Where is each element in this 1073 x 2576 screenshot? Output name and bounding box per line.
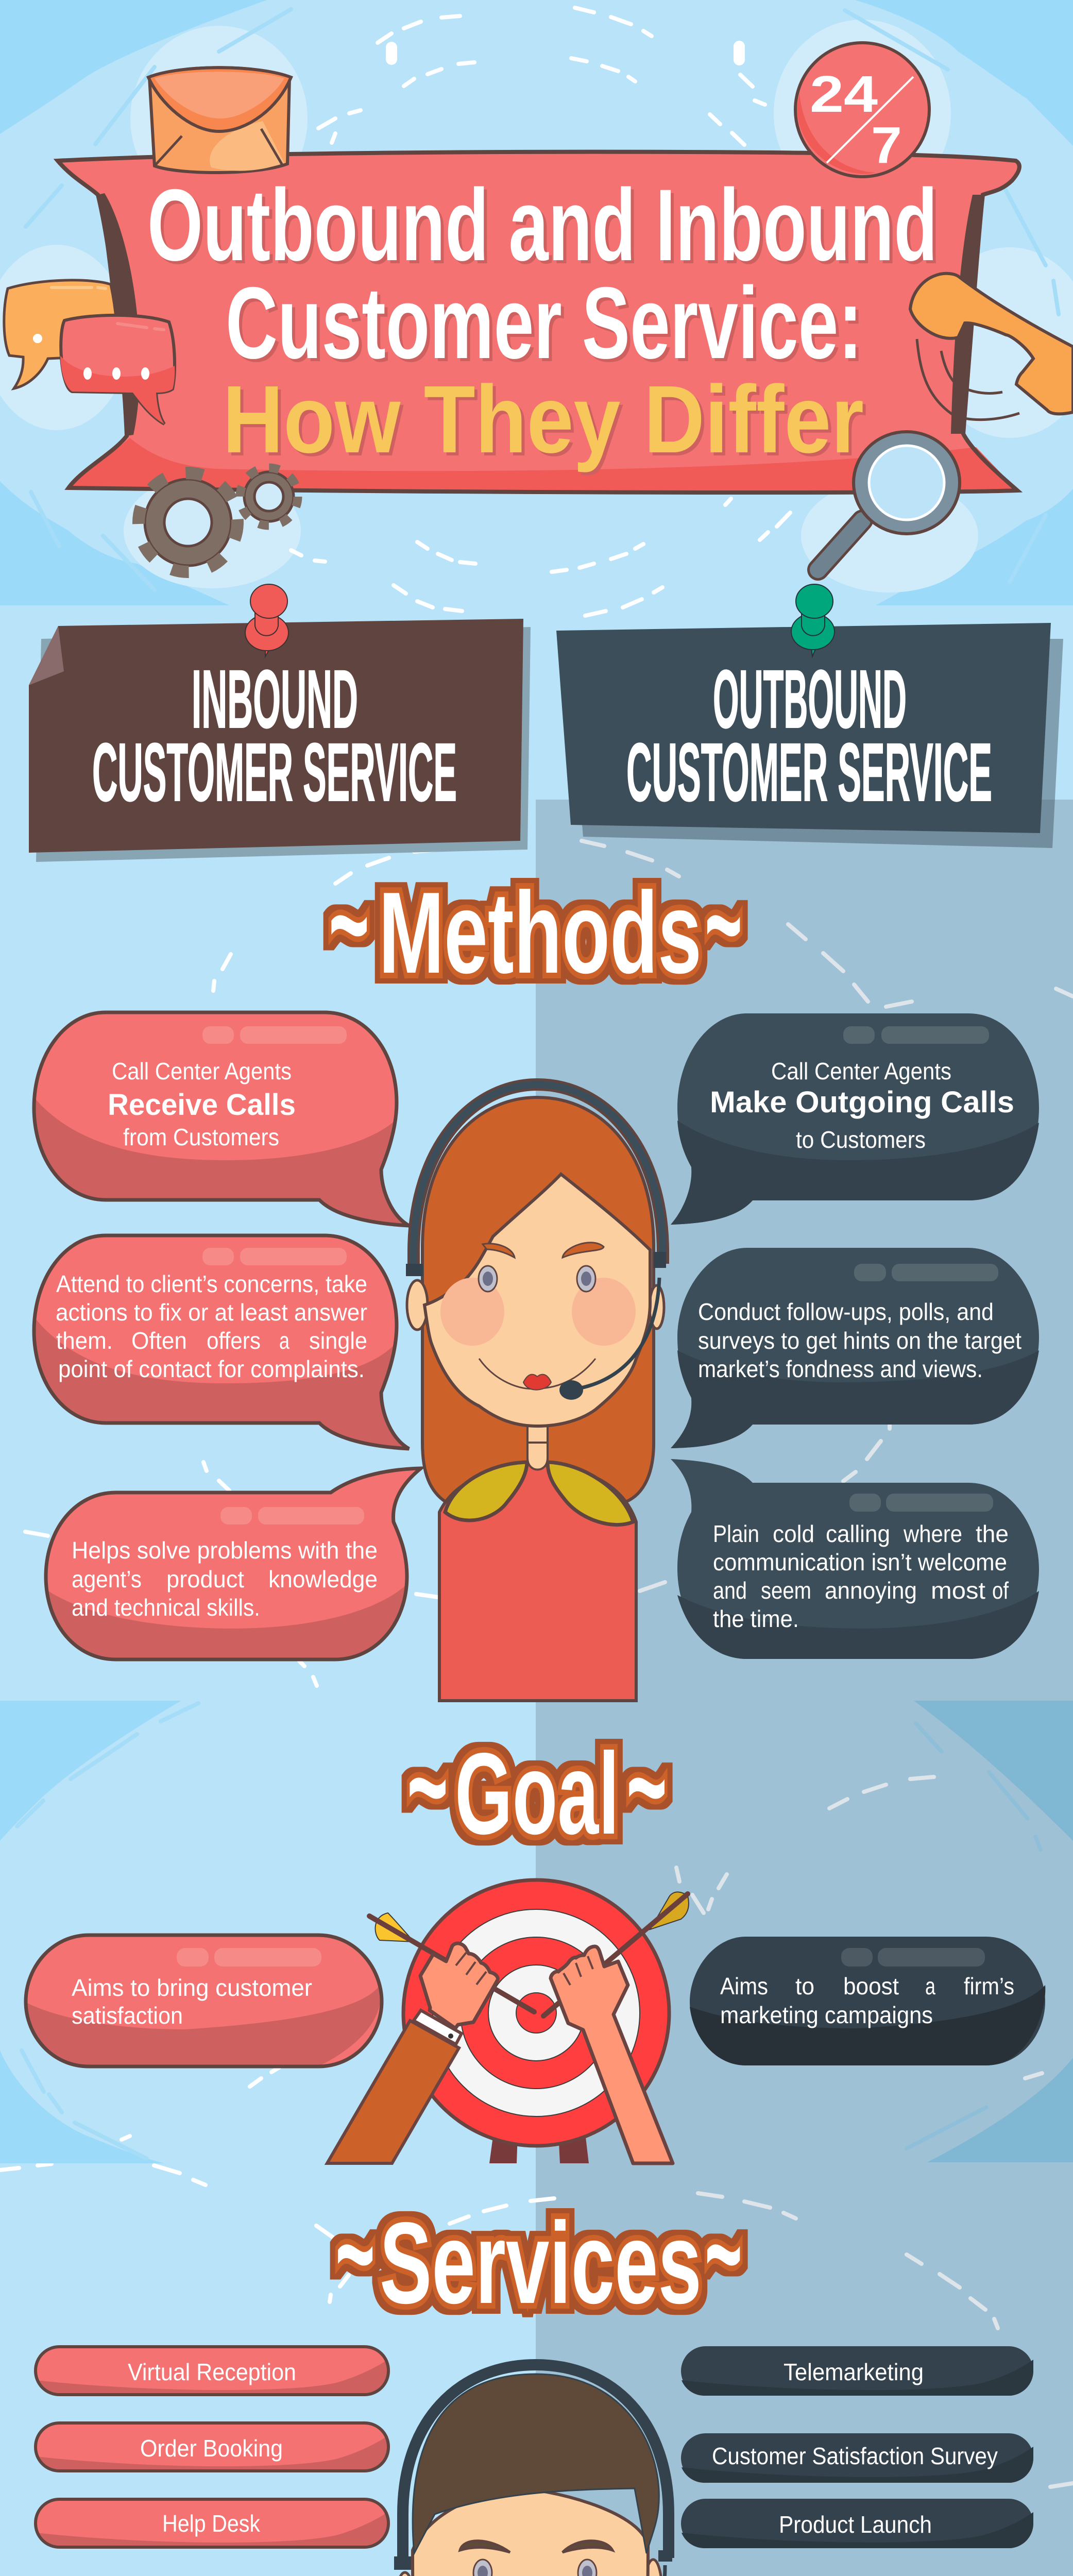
heading: goal bbox=[407, 1712, 667, 1861]
lips bbox=[523, 1375, 551, 1390]
banner side flaps bbox=[98, 193, 983, 436]
microphone bbox=[577, 2565, 665, 2576]
banner bbox=[58, 152, 1019, 493]
heading: services: ~ bbox=[335, 2179, 375, 2328]
heading: methods bbox=[329, 850, 742, 999]
dashes: header and left half bbox=[0, 8, 790, 2576]
character: female agent bbox=[406, 1084, 666, 1701]
heading: services: Services bbox=[380, 2198, 702, 2328]
torso bbox=[439, 1462, 636, 1701]
bubble: receive calls: Receive Calls bbox=[108, 1088, 296, 1122]
panel: inbound customer service: CUSTOMER SERVICE bbox=[92, 726, 457, 818]
infographic canvas: ~ bbox=[705, 850, 742, 999]
pin: green bbox=[791, 584, 834, 656]
service pill: order booking: Order Booking bbox=[140, 2435, 283, 2462]
heading: goal: ~ bbox=[407, 1712, 448, 1861]
heading: services bbox=[335, 2179, 742, 2328]
headband bbox=[414, 1084, 663, 1264]
heading: goal: ~ bbox=[626, 1712, 667, 1861]
bubble: conduct follow-ups: market’s fondness and views. bbox=[698, 1355, 983, 1382]
icon: 24/7 badge: 24 bbox=[810, 65, 878, 123]
infographic canvas: ~ bbox=[705, 2179, 742, 2328]
service pill: order booking bbox=[36, 2423, 388, 2471]
bubble: helps solve problems: product bbox=[166, 1566, 244, 1592]
blush bbox=[440, 1278, 504, 1346]
bubble: goal outbound: boost bbox=[843, 1973, 899, 1999]
banner lower shade bbox=[69, 438, 1017, 493]
pale blobs behind header icons bbox=[0, 20, 1073, 592]
bubble: attend to client's concerns: a bbox=[279, 1327, 289, 1354]
icon: gears bbox=[139, 468, 298, 572]
bubble: attend to client's concerns: Often bbox=[131, 1327, 187, 1354]
bubble: goal inbound: satisfaction bbox=[72, 2002, 183, 2029]
bubble: plain cold calling: Plain bbox=[713, 1520, 759, 1547]
header corner shapes bbox=[0, 0, 1073, 605]
bubble: conduct follow-ups: surveys to get hints on the target bbox=[698, 1327, 1021, 1354]
bubble: plain cold calling: most bbox=[931, 1577, 985, 1604]
icon: magnifying glass bbox=[818, 432, 960, 570]
service pill: help desk bbox=[36, 2499, 388, 2547]
bubble: receive calls: Call Center Agents bbox=[112, 1058, 292, 1084]
bubble: goal outbound: to bbox=[795, 1973, 814, 1999]
icon: 24/7 badge bbox=[795, 43, 929, 177]
bubble: goal inbound: Aims to bring customer bbox=[72, 1974, 312, 2001]
ears bbox=[407, 1280, 428, 1330]
pin: red bbox=[245, 584, 288, 656]
bubble: goal outbound: Aims bbox=[720, 1973, 768, 1999]
bubble: plain cold calling: annoying bbox=[825, 1577, 917, 1604]
earcups bbox=[406, 1264, 423, 1276]
icon: envelope bbox=[148, 67, 291, 173]
bubble: attend to client's concerns: single bbox=[309, 1327, 367, 1354]
bubble: helps solve problems: agent’s bbox=[72, 1566, 142, 1592]
bubble: attend to client's concerns: them. bbox=[56, 1327, 113, 1354]
goal band corners bbox=[0, 1701, 1073, 2163]
bubble: make outgoing calls: Make Outgoing Calls bbox=[710, 1086, 1014, 1119]
bubble: plain cold calling: the bbox=[976, 1520, 1009, 1547]
microphone bbox=[572, 1278, 659, 1389]
panel: outbound customer service bbox=[556, 623, 1063, 848]
bubble: conduct follow-ups: Conduct follow-ups, polls, and bbox=[698, 1298, 994, 1325]
bubble: plain cold calling: seem bbox=[761, 1577, 811, 1604]
bubble: goal inbound bbox=[26, 1935, 382, 2066]
service pill: product launch: Product Launch bbox=[779, 2511, 932, 2538]
bubble: plain cold calling bbox=[671, 1459, 1039, 1659]
left hand bbox=[420, 1943, 498, 2028]
earcups bbox=[394, 2556, 411, 2570]
bubble: attend to client's concerns: actions to fix or at least answer bbox=[56, 1299, 367, 1326]
dart flights bbox=[375, 1913, 414, 1942]
heading: methods: Methods bbox=[379, 868, 702, 997]
bubble: conduct follow-ups bbox=[671, 1248, 1039, 1448]
bubble: plain cold calling: and bbox=[713, 1577, 747, 1604]
character: male agent bbox=[394, 2365, 672, 2576]
sketch strokes on header backgrounds bbox=[26, 9, 1059, 590]
bubble: helps solve problems bbox=[46, 1468, 421, 1659]
service pill: help desk: Help Desk bbox=[162, 2510, 261, 2537]
service pill: customer satisfaction survey bbox=[681, 2433, 1033, 2483]
target with hands and darts bbox=[327, 1880, 689, 2163]
face bbox=[424, 1174, 650, 1426]
bubble: receive calls: from Customers bbox=[123, 1124, 279, 1150]
hair bbox=[422, 1097, 654, 1502]
smile bbox=[479, 1359, 595, 1389]
bubble: helps solve problems: and technical skills. bbox=[72, 1594, 260, 1621]
ears bbox=[396, 2572, 414, 2576]
neck bbox=[527, 1422, 548, 1469]
bubble: attend to client's concerns bbox=[34, 1235, 409, 1449]
bubble: make outgoing calls bbox=[671, 1013, 1039, 1225]
bubble: plain cold calling: the time. bbox=[713, 1605, 799, 1632]
bubble: plain cold calling: calling bbox=[826, 1520, 890, 1547]
service pill: virtual reception bbox=[36, 2347, 388, 2395]
bubble: plain cold calling: where bbox=[903, 1520, 962, 1547]
dart shafts bbox=[369, 1894, 688, 2016]
service pill: telemarketing bbox=[681, 2346, 1033, 2396]
banner front bbox=[58, 152, 1019, 493]
eyebrows bbox=[460, 2541, 510, 2552]
eyes bbox=[479, 1266, 497, 1292]
bubble: attend to client's concerns: offers bbox=[207, 1327, 261, 1354]
right arm and hand bbox=[551, 1946, 673, 2163]
service pill: customer satisfaction survey: Customer Satisfaction Survey bbox=[712, 2443, 998, 2469]
title: How They Differ bbox=[223, 366, 864, 473]
headband bbox=[403, 2365, 669, 2558]
bubble: goal outbound bbox=[690, 1937, 1045, 2065]
bubble: plain cold calling: cold bbox=[773, 1520, 814, 1547]
service pill: virtual reception: Virtual Reception bbox=[128, 2359, 296, 2385]
hair bbox=[413, 2374, 659, 2553]
service pill: product launch bbox=[681, 2499, 1033, 2548]
heading: methods: ~ bbox=[329, 850, 369, 999]
face bbox=[413, 2488, 648, 2576]
icon: telephone bbox=[910, 274, 1073, 420]
eyes bbox=[473, 2560, 492, 2576]
icon: chat bubbles bbox=[4, 280, 175, 424]
eyebrows bbox=[483, 1244, 515, 1258]
bubble: plain cold calling: communication isn’t welcome bbox=[713, 1549, 1007, 1575]
bubble: goal outbound: a bbox=[925, 1973, 935, 1999]
icon: 24/7 badge: 7 bbox=[871, 116, 902, 174]
panel: inbound customer service bbox=[29, 619, 531, 862]
panel: inbound customer service: INBOUND bbox=[192, 653, 358, 745]
bubble: attend to client's concerns: Attend to client’s concerns, take bbox=[56, 1270, 367, 1297]
collar bbox=[445, 1462, 527, 1520]
bubble: goal outbound: firm’s bbox=[964, 1973, 1014, 1999]
bubble: receive calls bbox=[34, 1012, 409, 1226]
service pill: telemarketing: Telemarketing bbox=[784, 2359, 924, 2385]
bubble: goal outbound: marketing campaigns bbox=[720, 2002, 933, 2028]
title bbox=[147, 168, 938, 473]
bubble: attend to client's concerns: point of contact for complaints. bbox=[58, 1355, 365, 1382]
left arm bbox=[327, 2021, 459, 2163]
bubble: make outgoing calls: to Customers bbox=[796, 1126, 926, 1153]
bubble: plain cold calling: of bbox=[992, 1577, 1009, 1604]
target rings bbox=[403, 1880, 669, 2146]
bubble: helps solve problems: Helps solve problems with the bbox=[72, 1537, 378, 1564]
heading: goal: Goal bbox=[455, 1728, 619, 1858]
stand legs bbox=[489, 2133, 589, 2163]
left cuff bbox=[414, 2010, 462, 2044]
bubble: helps solve problems: knowledge bbox=[268, 1566, 378, 1592]
bubble: make outgoing calls: Call Center Agents bbox=[771, 1058, 951, 1084]
dashes: right half bbox=[582, 841, 1073, 2576]
